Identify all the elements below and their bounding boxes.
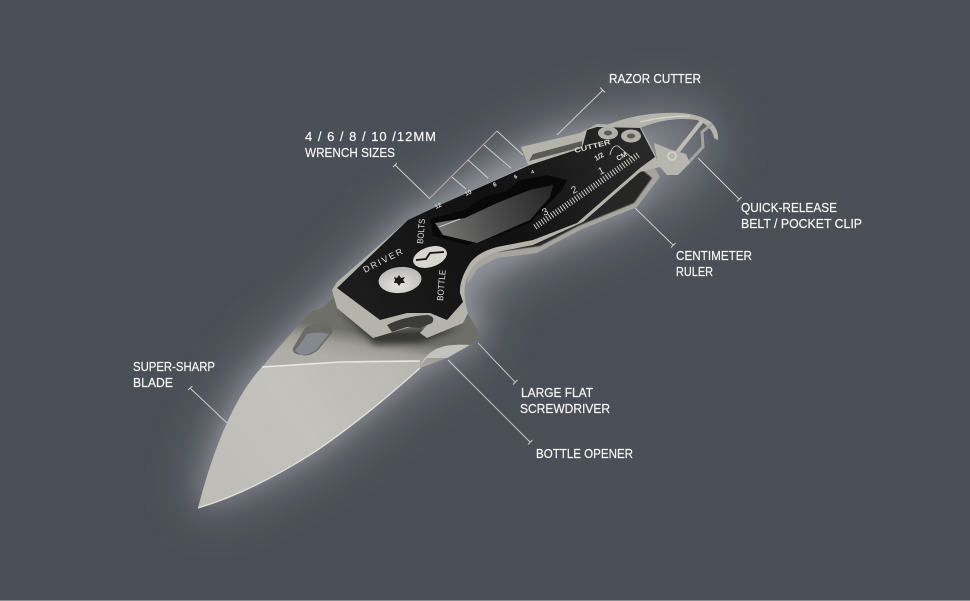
label: quick-release clip: BELT / POCKET CLIP: [741, 216, 862, 231]
label: centimeter ruler: CENTIMETER: [676, 248, 752, 263]
label: quick-release clip: [741, 200, 862, 231]
ruler scale: [535, 139, 638, 227]
label: super-sharp blade: SUPER-SHARP: [133, 359, 215, 374]
wrench size marks: 6: [513, 174, 519, 181]
carabiner clip: [600, 113, 718, 175]
blade: [198, 298, 482, 508]
wrench size marks: 12: [434, 202, 443, 211]
ruler scale: 3: [541, 206, 551, 219]
handle shadow on blade: [337, 308, 462, 345]
label: centimeter ruler: RULER: [676, 264, 713, 279]
label: wrench sizes: WRENCH SIZES: [305, 145, 395, 160]
label: razor cutter: RAZOR CUTTER: [609, 71, 701, 86]
label: bottle opener: BOTTLE OPENER: [536, 446, 633, 461]
pivot screw: [377, 265, 423, 295]
handle labels: DRIVER: [361, 246, 405, 275]
back plate: [467, 160, 660, 285]
wrench size marks: 4: [530, 169, 536, 176]
background glow: [198, 112, 718, 508]
label: large flat screwdriver: [520, 385, 610, 416]
ruler scale: CM: [616, 151, 629, 163]
logo: [410, 242, 450, 272]
ruler scale: 1: [597, 165, 607, 178]
handle labels: [361, 218, 448, 301]
bottle opener notch: [387, 315, 433, 332]
knife: [198, 113, 718, 508]
leader lines: [188, 88, 742, 444]
label: super-sharp blade: [133, 359, 215, 390]
wrench size marks: 10: [464, 189, 473, 198]
label: wrench sizes: [305, 129, 436, 160]
ruler scale: 2: [570, 184, 580, 197]
ruler scale: CUTTER: [574, 139, 611, 155]
black handle: [337, 127, 655, 320]
label: large flat screwdriver: LARGE FLAT: [521, 385, 593, 400]
rivets: [598, 126, 641, 142]
handle labels: BOLTS: [415, 218, 427, 244]
silver liner: [332, 124, 660, 338]
wrench size marks: 8: [492, 182, 498, 189]
handle labels: BOTTLE: [435, 269, 448, 301]
label: centimeter ruler: [676, 248, 752, 279]
wrench cut-out: [430, 175, 567, 245]
screwdriver tip: [420, 345, 470, 366]
ruler scale: 1/2: [594, 152, 606, 163]
label: wrench sizes: 4 / 6 / 8 / 10 /12MM: [305, 129, 436, 144]
blade hole: [293, 324, 332, 355]
wrench size marks: [434, 169, 536, 211]
label: super-sharp blade: BLADE: [133, 375, 173, 390]
label: large flat screwdriver: SCREWDRIVER: [520, 401, 610, 416]
label: quick-release clip: QUICK-RELEASE: [741, 200, 837, 215]
